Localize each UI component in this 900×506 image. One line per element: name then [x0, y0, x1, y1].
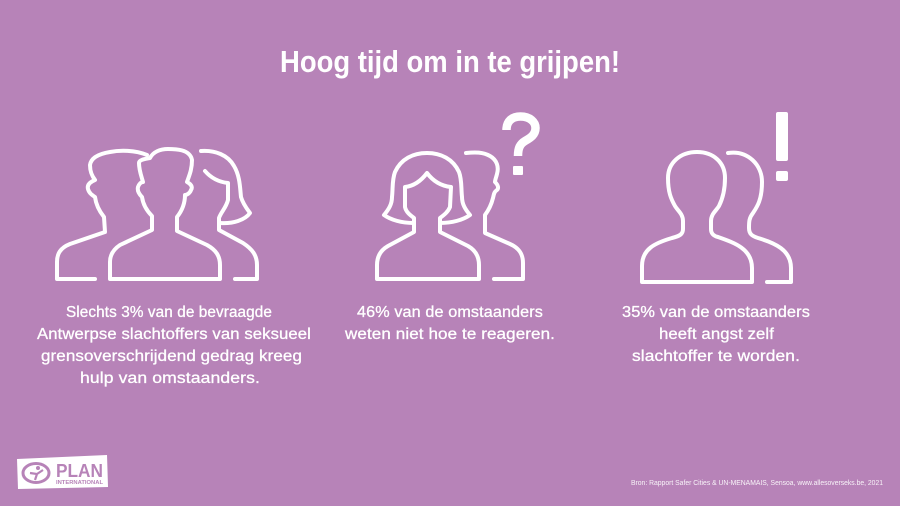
text block: statistic 3 percent: Antwerpse slachtoffers van seksueel [37, 326, 311, 343]
icon: two people with exclamation mark [642, 112, 791, 282]
text block: statistic 35 percent: slachtoffer te worden. [632, 348, 800, 365]
text block: statistic 46 percent: weten niet hoe te reageren. [344, 326, 555, 343]
text block: statistic 35 percent: 35% van de omstaanders [622, 304, 810, 321]
text block: statistic 35 percent [622, 304, 810, 365]
title: Hoog tijd om in te grijpen! [280, 44, 620, 79]
text block: statistic 46 percent: 46% van de omstaanders [357, 304, 543, 321]
text block: statistic 3 percent: Slechts 3% van de bevraagde [66, 304, 272, 321]
text block: statistic 35 percent: heeft angst zelf [659, 326, 775, 343]
text block: statistic 3 percent [37, 304, 311, 387]
logo: Plan International: PLAN [56, 461, 103, 481]
icon: group of three people [57, 149, 257, 279]
text block: statistic 3 percent: grensoverschrijdend gedrag kreeg [41, 348, 302, 365]
icon: woman and man with question mark [377, 116, 536, 279]
text block: statistic 3 percent: hulp van omstaanders. [80, 370, 260, 387]
icon: exclamation mark [776, 112, 788, 181]
logo: Plan International: INTERNATIONAL [56, 480, 103, 486]
logo: Plan International [17, 455, 108, 489]
text block: statistic 46 percent [344, 304, 555, 343]
icon: question mark [506, 116, 536, 156]
